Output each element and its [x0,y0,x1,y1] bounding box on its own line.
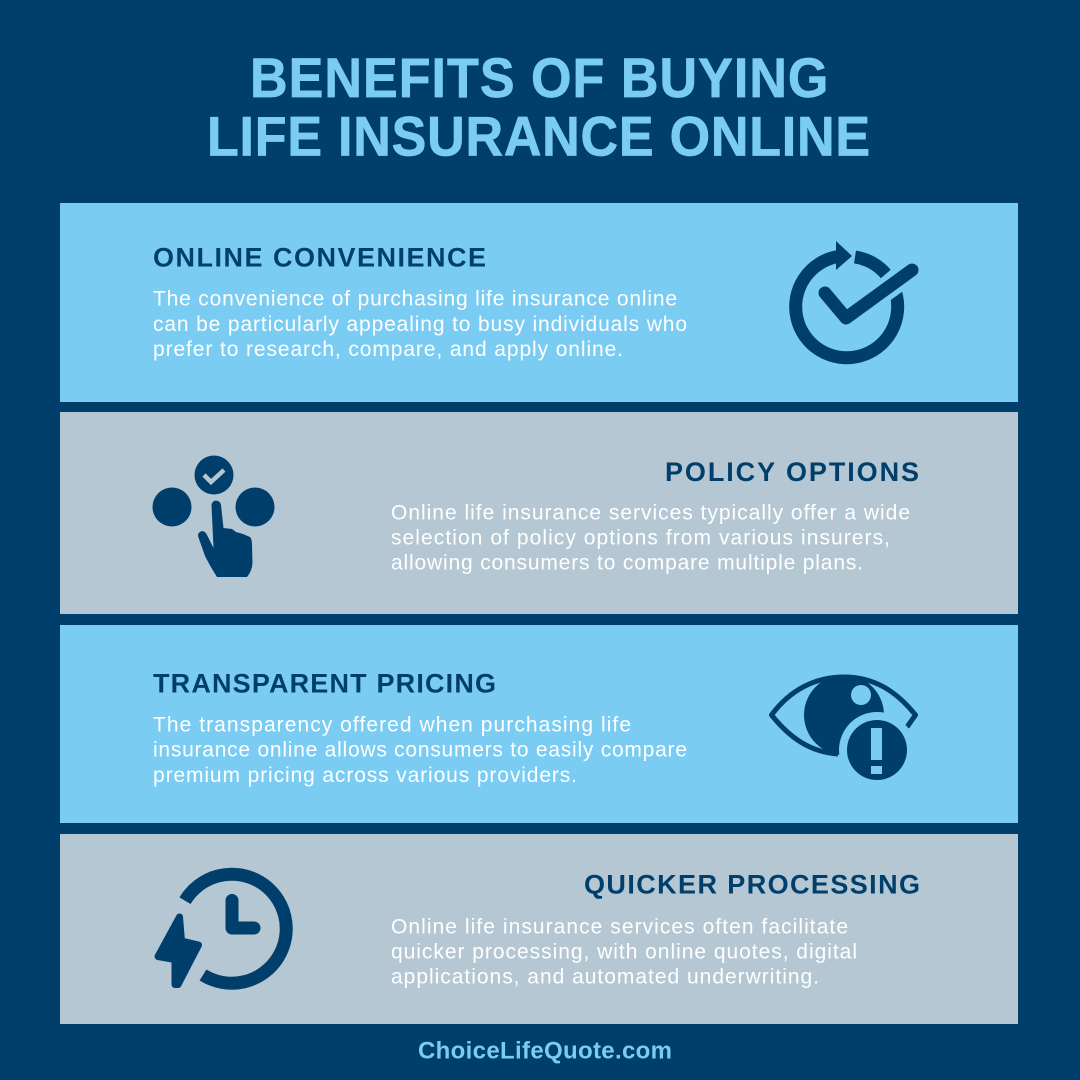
text: quicker processing description [391,916,857,988]
text: quicker processing description: Online life insurance services often facilitate [391,916,848,938]
heading: quicker processing: QUICKER PROCESSING [584,870,920,900]
panel: transparent pricing [60,625,1018,823]
footer: website: ChoiceLifeQuote.com [418,1038,672,1064]
text: policy options description [391,502,910,574]
title: LIFE INSURANCE ONLINE [207,106,870,168]
title: BENEFITS OF BUYING [250,47,828,109]
text: quicker processing description: applications, and automated underwriting. [391,966,819,988]
panel: online convenience [60,203,1018,402]
text: policy options description: Online life insurance services typically offer a wide [391,502,910,524]
text: transparent pricing description: premium pricing across various providers. [153,764,577,787]
heading: transparent pricing: TRANSPARENT PRICING [153,668,496,698]
text: online convenience description: can be particularly appealing to busy individuals who [153,313,687,336]
heading: policy options: POLICY OPTIONS [665,457,919,487]
text: policy options description: selection of policy options from various insurers, [391,526,890,550]
title [207,47,870,168]
icon: eye with exclamation badge [772,675,916,788]
icon: circular arrow with check mark [796,241,925,358]
text: online convenience description: The convenience of purchasing life insurance online [153,288,677,310]
text: policy options description: allowing consumers to compare multiple plans. [391,552,863,574]
panel: policy options [60,412,1018,614]
text: transparent pricing description: insurance online allows consumers to easily compare [153,738,687,762]
panel: quicker processing [60,834,1018,1024]
text: online convenience description: prefer to research, compare, and apply online. [153,338,623,361]
text: quicker processing description: quicker processing, with online quotes, digital [391,940,857,964]
text: transparent pricing description [153,714,687,787]
text: transparent pricing description: The transparency offered when purchasing life [153,714,631,736]
icon: hand selecting option [152,456,274,577]
heading: online convenience: ONLINE CONVENIENCE [153,242,486,272]
icon: clock with lightning bolt [158,874,286,984]
text: online convenience description [153,288,687,361]
